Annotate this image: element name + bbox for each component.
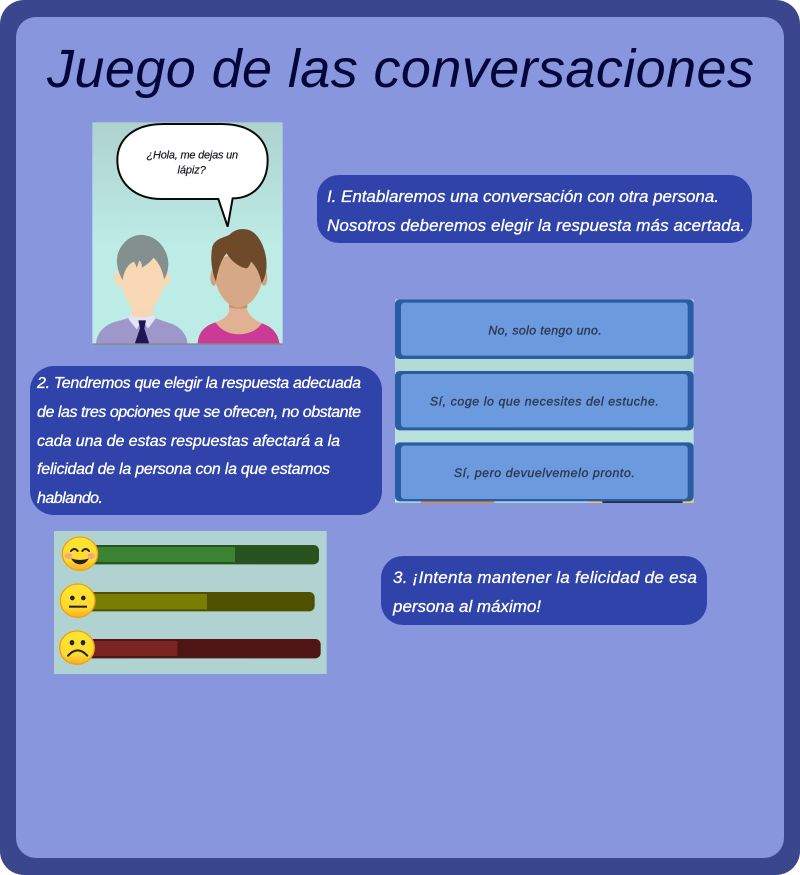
instruction 2: hablando. xyxy=(37,490,103,507)
instruction 3 xyxy=(381,556,707,625)
speech bubble xyxy=(117,124,268,227)
title: Juego de las conversaciones xyxy=(46,39,754,99)
speech bubble: ¿Hola, me dejas un xyxy=(146,149,238,161)
speech bubble: lápiz? xyxy=(177,165,207,177)
happy bar xyxy=(62,537,319,570)
neutral bar xyxy=(60,584,315,617)
option 3 xyxy=(395,442,694,501)
illustration: two people talking xyxy=(92,122,283,345)
man xyxy=(96,235,188,344)
option 2 xyxy=(395,371,694,430)
option 3: Sí, pero devuelvemelo pronto. xyxy=(454,466,635,480)
instruction 2: de las tres opciones que se ofrecen, no obstante xyxy=(37,404,361,421)
option 1 xyxy=(395,299,694,359)
instruction 3: persona al máximo! xyxy=(392,597,541,616)
instruction 2: cada una de estas respuestas afectará a la xyxy=(37,433,340,450)
answer options screenshot xyxy=(395,299,694,503)
instruction 2: 2. Tendremos que elegir la respuesta adecuada xyxy=(36,375,361,392)
sad bar xyxy=(60,631,321,664)
instruction 1 xyxy=(317,175,752,243)
option 1: No, solo tengo uno. xyxy=(488,323,602,337)
instruction 1: I. Entablaremos una conversación con otra persona. xyxy=(327,187,719,206)
happiness bars xyxy=(54,531,327,674)
woman xyxy=(198,229,280,344)
option 2: Sí, coge lo que necesites del estuche. xyxy=(430,395,659,409)
instruction 3: 3. ¡Intenta mantener la felicidad de esa xyxy=(393,568,697,587)
instruction 2: felicidad de la persona con la que estamos xyxy=(37,461,330,478)
instruction 1: Nosotros deberemos elegir la respuesta más acertada. xyxy=(327,216,745,235)
instruction 2 xyxy=(30,366,382,515)
